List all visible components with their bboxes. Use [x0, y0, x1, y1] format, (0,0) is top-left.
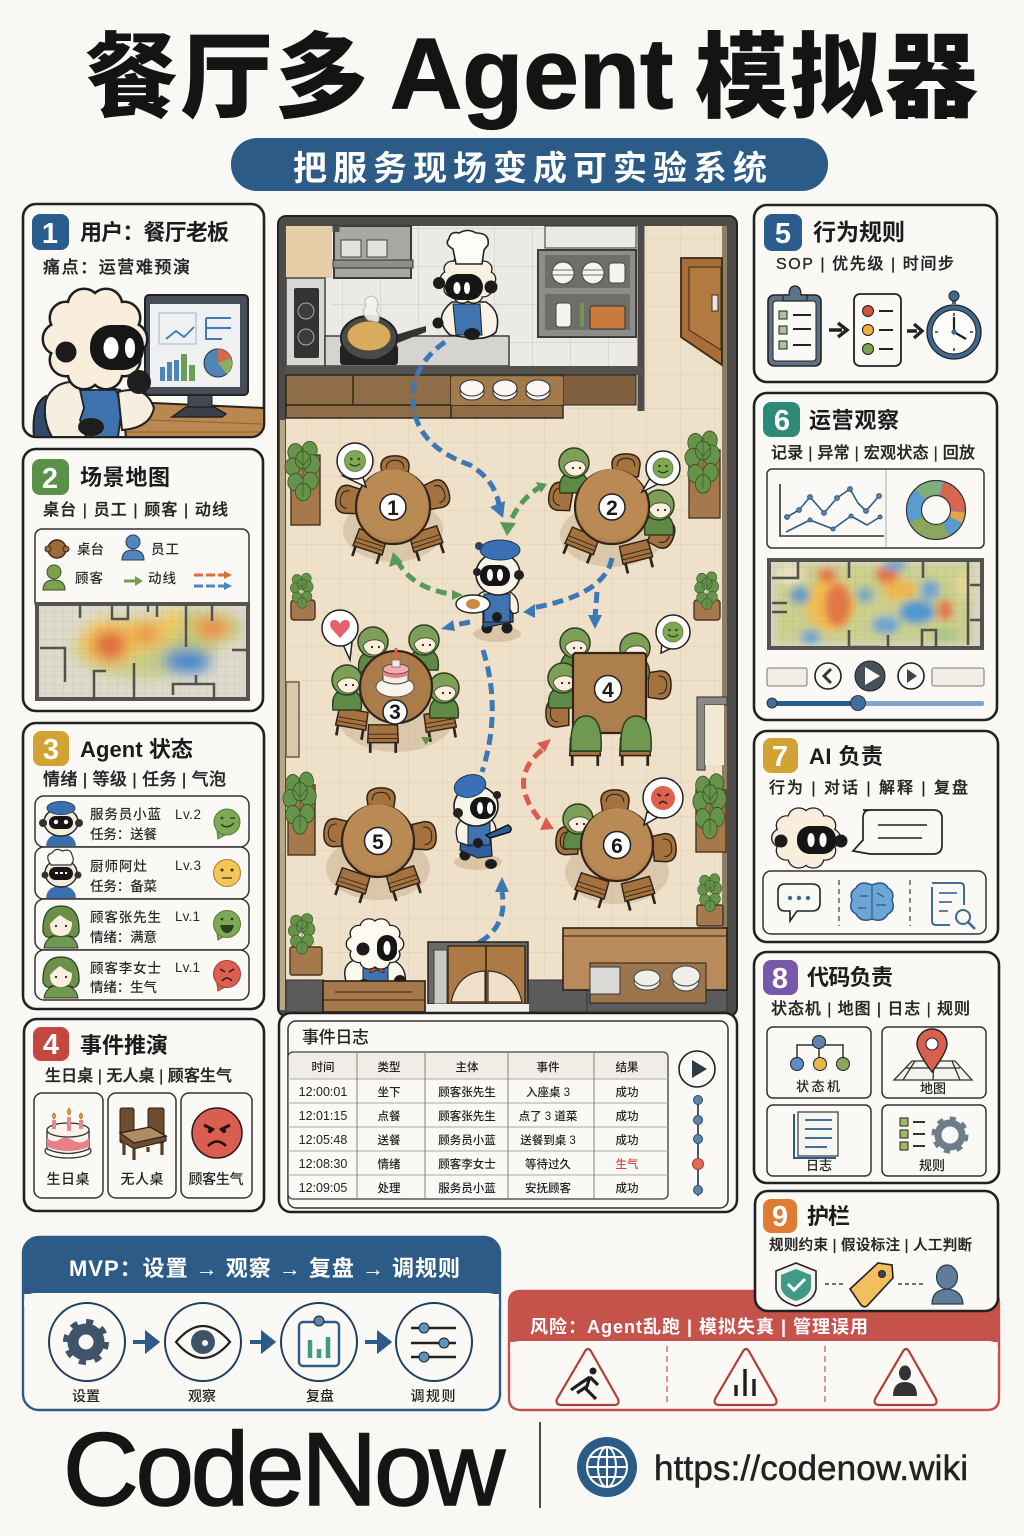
card: rules: [882, 1105, 986, 1176]
heading 7: AI 负责: [809, 744, 883, 769]
icon: person warning: [875, 1349, 936, 1405]
badge 9: 9: [772, 1201, 788, 1233]
badge 1: [32, 214, 69, 250]
table 5: 5: [372, 831, 384, 854]
log table: 安抚顾客: [525, 1181, 571, 1195]
waiter robot with plate: [456, 540, 524, 642]
sheep robot: [772, 809, 848, 867]
panel: MVP: [23, 1237, 500, 1410]
log table: 服务员小蓝: [438, 1181, 496, 1195]
row: customer Zhang: [35, 899, 249, 950]
host robot at front desk: [345, 920, 406, 991]
log table: [288, 1052, 668, 1199]
row: chef: 厨师阿灶: [90, 859, 148, 874]
slider: [767, 696, 984, 710]
subtitle pill: [231, 138, 828, 191]
heading 8: 代码负责: [807, 965, 893, 990]
badge 3: [33, 731, 69, 766]
badge 5: [764, 214, 802, 251]
stove: [286, 278, 325, 366]
log table: 时间: [312, 1060, 334, 1074]
panel: restaurant floor map: [278, 216, 737, 1016]
table 6: [555, 790, 677, 911]
log heading: 事件日志: [302, 1028, 369, 1047]
log table: 成功: [616, 1109, 638, 1123]
heading 4: 事件推演: [80, 1033, 168, 1058]
badge 4: 4: [43, 1029, 59, 1061]
log table: 送餐: [378, 1133, 401, 1147]
log table: 生气: [616, 1157, 639, 1171]
heading 5: 行为规则: [813, 219, 905, 245]
badge 1: 1: [42, 218, 58, 250]
log table: 成功: [616, 1085, 638, 1099]
table 2: [547, 448, 678, 574]
table 3 with cake: 3: [389, 701, 401, 724]
card: birthday: 生日桌: [46, 1171, 90, 1187]
service counter: [286, 375, 636, 418]
row: customer Zhang: Lv.1: [175, 909, 200, 924]
badge 7: 7: [772, 741, 788, 773]
legend: 员工: [151, 542, 179, 557]
log table: 点了 3 道菜: [519, 1109, 578, 1123]
AI tools box: [763, 871, 986, 934]
pain point text: 痛点：运营难预演: [43, 258, 190, 277]
log table: 12:09:05: [299, 1181, 347, 1195]
title: Agent: [390, 18, 673, 130]
heading 6: 运营观察: [809, 408, 899, 433]
log table: 12:01:15: [299, 1109, 347, 1123]
sub text 7: 行为 | 对话 | 解释 | 复盘: [769, 779, 968, 797]
sub text 9: 规则约束 | 假设标注 | 人工判断: [769, 1236, 972, 1254]
row: customer Li: [35, 950, 249, 1000]
step: tune rules: [396, 1303, 472, 1404]
timeline: [692, 1096, 704, 1196]
sub text 3: 情绪 | 等级 | 任务 | 气泡: [43, 770, 226, 789]
icon: tag: [850, 1263, 893, 1307]
risk heading: 风险：Agent乱跑 | 模拟失真 | 管理误用: [530, 1316, 868, 1337]
arrow heads: [389, 482, 602, 945]
badge 3: 3: [43, 734, 59, 766]
hood shelf: [333, 226, 413, 278]
icon: stopwatch: [927, 291, 981, 359]
legend: 动线: [148, 571, 176, 586]
door: [681, 258, 722, 365]
badge 2: 2: [42, 463, 58, 495]
subtitle pill: 把服务现场变成可实验系统: [293, 150, 767, 188]
row: customer Li: Lv.1: [175, 960, 200, 975]
route arrows: [397, 342, 612, 942]
log table: 结果: [616, 1061, 639, 1074]
log table: 事件: [536, 1060, 560, 1074]
illustration: owner robot at monitor: [34, 290, 264, 437]
table 3 with cake: [332, 625, 459, 753]
panel: 6 observation: [754, 393, 997, 720]
row: chef: 任务：备菜: [90, 878, 158, 894]
row: waiter: [35, 796, 249, 847]
sub text 5: SOP | 优先级 | 时间步: [776, 255, 954, 273]
row: customer Li: 顾客李女士: [90, 960, 161, 976]
badge 5: 5: [775, 218, 791, 250]
card: log: [767, 1105, 871, 1176]
step: observe: [165, 1303, 241, 1404]
arrow: [250, 1334, 273, 1350]
heading 1: 用户：餐厅老板: [80, 220, 229, 245]
badge 6: [763, 402, 800, 437]
waiter robot walking: [452, 771, 511, 870]
title: 餐厅多: [85, 26, 368, 130]
log table: 坐下: [378, 1086, 400, 1099]
counter: [325, 336, 509, 366]
pan: [341, 296, 426, 360]
heading 2: 场景地图: [80, 465, 170, 490]
sub text 4: 生日桌 | 无人桌 | 顾客生气: [45, 1066, 232, 1085]
panel: event log: [279, 1013, 737, 1212]
panel: 1 user: [23, 204, 264, 437]
panel: 9 guardrails: [755, 1191, 998, 1311]
icon: shield: [776, 1263, 816, 1306]
brand logo: CodeNow: [63, 1412, 506, 1528]
heatmap 6: [767, 558, 984, 650]
log table: 12:00:01: [299, 1085, 347, 1099]
card: state machine: [767, 1027, 871, 1098]
front desk: [323, 981, 425, 1012]
log table: 成功: [616, 1133, 638, 1147]
MVP heading: MVP：设置 → 观察 → 复盘 → 调规则: [69, 1256, 460, 1281]
plates: [460, 380, 550, 400]
row: customer Zhang: 情绪：满意: [90, 929, 157, 945]
bottom right counter: [563, 928, 727, 1003]
log table: 主体: [456, 1060, 479, 1074]
panel: 8 code: [754, 952, 999, 1183]
divider: [539, 1422, 541, 1508]
step: review: [281, 1303, 357, 1404]
sub text 2: 桌台 | 员工 | 顾客 | 动线: [43, 500, 228, 519]
row: customer Li: 情绪：生气: [90, 980, 158, 995]
heatmap 2: [36, 603, 249, 700]
card: angry customer: [181, 1093, 252, 1198]
step: tune rules: 调规则: [410, 1388, 456, 1404]
sub text 6: 记录 | 异常 | 宏观状态 | 回放: [771, 444, 975, 462]
line and donut chart: [767, 469, 984, 548]
legend: [35, 529, 249, 609]
row: chef: [35, 847, 249, 899]
table 1: [334, 456, 453, 565]
log table: 情绪: [378, 1157, 401, 1171]
row: chef: Lv.3: [175, 858, 201, 873]
icon: bars warning: [715, 1349, 776, 1405]
log table: 成功: [616, 1181, 638, 1195]
heading 3: Agent 状态: [80, 737, 193, 762]
icon: globe: [577, 1437, 637, 1497]
card: map pin: 地图: [920, 1081, 946, 1096]
title: 模拟器: [695, 26, 978, 130]
panel: 3 agent state: [23, 723, 264, 1009]
table 1: 1: [387, 497, 399, 520]
kitchen: [285, 226, 722, 418]
badge 8: 8: [772, 963, 788, 995]
log table: 12:08:30: [299, 1157, 347, 1171]
dividers: [667, 1346, 825, 1405]
card: state machine: 状态机: [796, 1079, 840, 1094]
shelf: [538, 250, 636, 337]
log table: 点餐: [378, 1109, 401, 1123]
badge 8: [763, 960, 798, 995]
log table: 顾务员小蓝: [438, 1133, 496, 1147]
badge 6: 6: [774, 405, 790, 437]
card: birthday: [34, 1093, 103, 1198]
arrow: [829, 323, 847, 337]
bottom walls: [286, 980, 727, 1012]
log table: 12:05:48: [299, 1133, 347, 1147]
log table: 类型: [378, 1060, 400, 1074]
log table: 等待过久: [525, 1157, 571, 1171]
speech bubble: [853, 810, 942, 854]
badge 4: [33, 1027, 69, 1061]
step: settings: 设置: [72, 1388, 100, 1404]
panel: risks: [509, 1291, 999, 1410]
website url: https://codenow.wiki: [654, 1449, 968, 1488]
wall fittings: [286, 682, 727, 770]
entrance doors: [427, 942, 529, 1014]
row: waiter: 服务员小蓝: [90, 807, 161, 822]
log table: 入座桌 3: [526, 1085, 570, 1099]
row: waiter: Lv.2: [175, 807, 201, 822]
log table: 顾客李女士: [438, 1157, 496, 1171]
row: waiter: 任务：送餐: [90, 826, 158, 842]
log table: 顾客张先生: [438, 1085, 496, 1099]
log table: 处理: [378, 1181, 401, 1195]
icon: running warning: [557, 1349, 618, 1405]
plants: [283, 431, 726, 975]
icon: person: [932, 1265, 963, 1304]
arrow: [365, 1334, 389, 1350]
table 5: [323, 788, 437, 904]
title: [85, 18, 978, 130]
icon: priority list: [854, 294, 901, 366]
card: angry customer: 顾客生气: [188, 1171, 244, 1187]
panel: 4 events: [24, 1019, 264, 1211]
step: review: 复盘: [306, 1388, 334, 1404]
legend: 顾客: [75, 570, 104, 586]
badge 9: [763, 1199, 797, 1233]
table 6: 6: [611, 835, 623, 858]
icon: clipboard: [768, 286, 821, 366]
arrow: [133, 1334, 157, 1350]
card: map pin: [882, 1027, 986, 1098]
legend: 桌台: [77, 541, 104, 557]
speech bubbles: [322, 443, 690, 825]
dashes: [825, 1283, 925, 1285]
badge 2: [32, 459, 69, 495]
card: log: 日志: [806, 1158, 832, 1173]
table 4 rectangular: [546, 628, 671, 766]
panel: 5 rules: [754, 205, 997, 382]
arrow: [907, 324, 922, 338]
step: observe: 观察: [188, 1388, 216, 1404]
playback controls: [767, 661, 984, 691]
card: rules: 规则: [919, 1158, 945, 1173]
row: customer Zhang: 顾客张先生: [90, 909, 161, 925]
badge 7: [763, 738, 798, 773]
table 2: 2: [606, 497, 618, 520]
panel: 7 AI: [754, 731, 998, 942]
card: empty table: [108, 1093, 176, 1198]
play button: [679, 1051, 715, 1087]
chef robot: [432, 230, 498, 340]
sub text 8: 状态机 | 地图 | 日志 | 规则: [771, 1000, 970, 1018]
heading 9: 护栏: [807, 1204, 850, 1229]
card: empty table: 无人桌: [120, 1171, 164, 1187]
log table: 顾客张先生: [438, 1109, 496, 1123]
table 4 rectangular: 4: [602, 679, 614, 702]
log table: 送餐到桌 3: [520, 1133, 576, 1147]
step: settings: [49, 1303, 125, 1404]
panel: 2 map: [23, 449, 263, 711]
